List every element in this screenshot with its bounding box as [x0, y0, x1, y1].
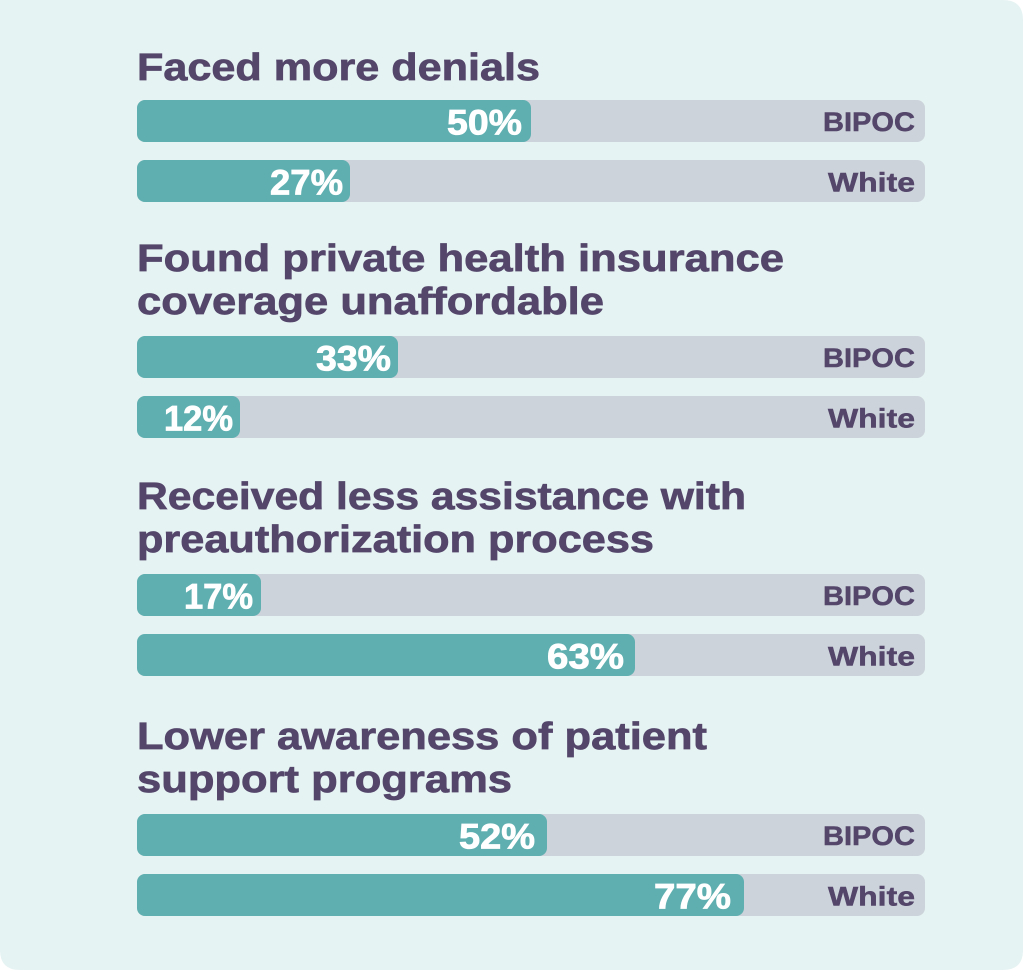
section: unaffordable coverage — [137, 238, 925, 438]
section: patient support awareness — [137, 716, 925, 916]
heading: found private health insurance coverage unaffordable: Found private health insurance — [137, 238, 784, 280]
bar: BIPOC 33%: 33% — [316, 340, 391, 378]
bar: White 77%: 77% — [654, 878, 731, 916]
bar: White 63% — [137, 634, 925, 676]
heading: found private health insurance coverage unaffordable: coverage unaffordable — [137, 281, 604, 323]
heading: lower awareness of patient support programs: Lower awareness of patient — [137, 716, 707, 758]
bar: White 12%: 12% — [164, 400, 233, 438]
bar: BIPOC 17%: 17% — [184, 578, 253, 616]
bar: BIPOC 50%: BIPOC — [823, 107, 915, 137]
bar: BIPOC 50%: 50% — [447, 104, 522, 142]
heading: received less assistance with preauthorization process: Received less assistance with — [137, 476, 746, 518]
bar: BIPOC 33%: BIPOC — [823, 343, 915, 373]
section: faced more denials — [137, 47, 925, 202]
bar: White 63%: White — [828, 642, 915, 672]
bar: White 77% — [137, 874, 925, 916]
bar: BIPOC 17% — [137, 574, 925, 616]
bar: White 12%: White — [828, 404, 915, 434]
bar: BIPOC 52% — [137, 814, 925, 856]
bar: White 27%: White — [828, 168, 915, 198]
bar: BIPOC 52%: 52% — [459, 818, 535, 856]
bar: BIPOC 52%: BIPOC — [823, 821, 915, 851]
bar: BIPOC 17%: BIPOC — [823, 581, 915, 611]
heading: lower awareness of patient support programs: support programs — [137, 759, 512, 801]
bar: BIPOC 50% — [137, 100, 925, 142]
bar: White 63%: 63% — [547, 638, 624, 676]
bar: White 27%: 27% — [270, 164, 343, 202]
bar: White 27% — [137, 160, 925, 202]
bar: White 77%: White — [828, 882, 915, 912]
heading: received less assistance with preauthorization process: preauthorization process — [137, 519, 654, 561]
bar: White 12% — [137, 396, 925, 438]
section: preauthorization assistance — [137, 476, 925, 676]
heading: faced more denials: Faced more denials — [137, 47, 540, 89]
bar: BIPOC 33% — [137, 336, 925, 378]
